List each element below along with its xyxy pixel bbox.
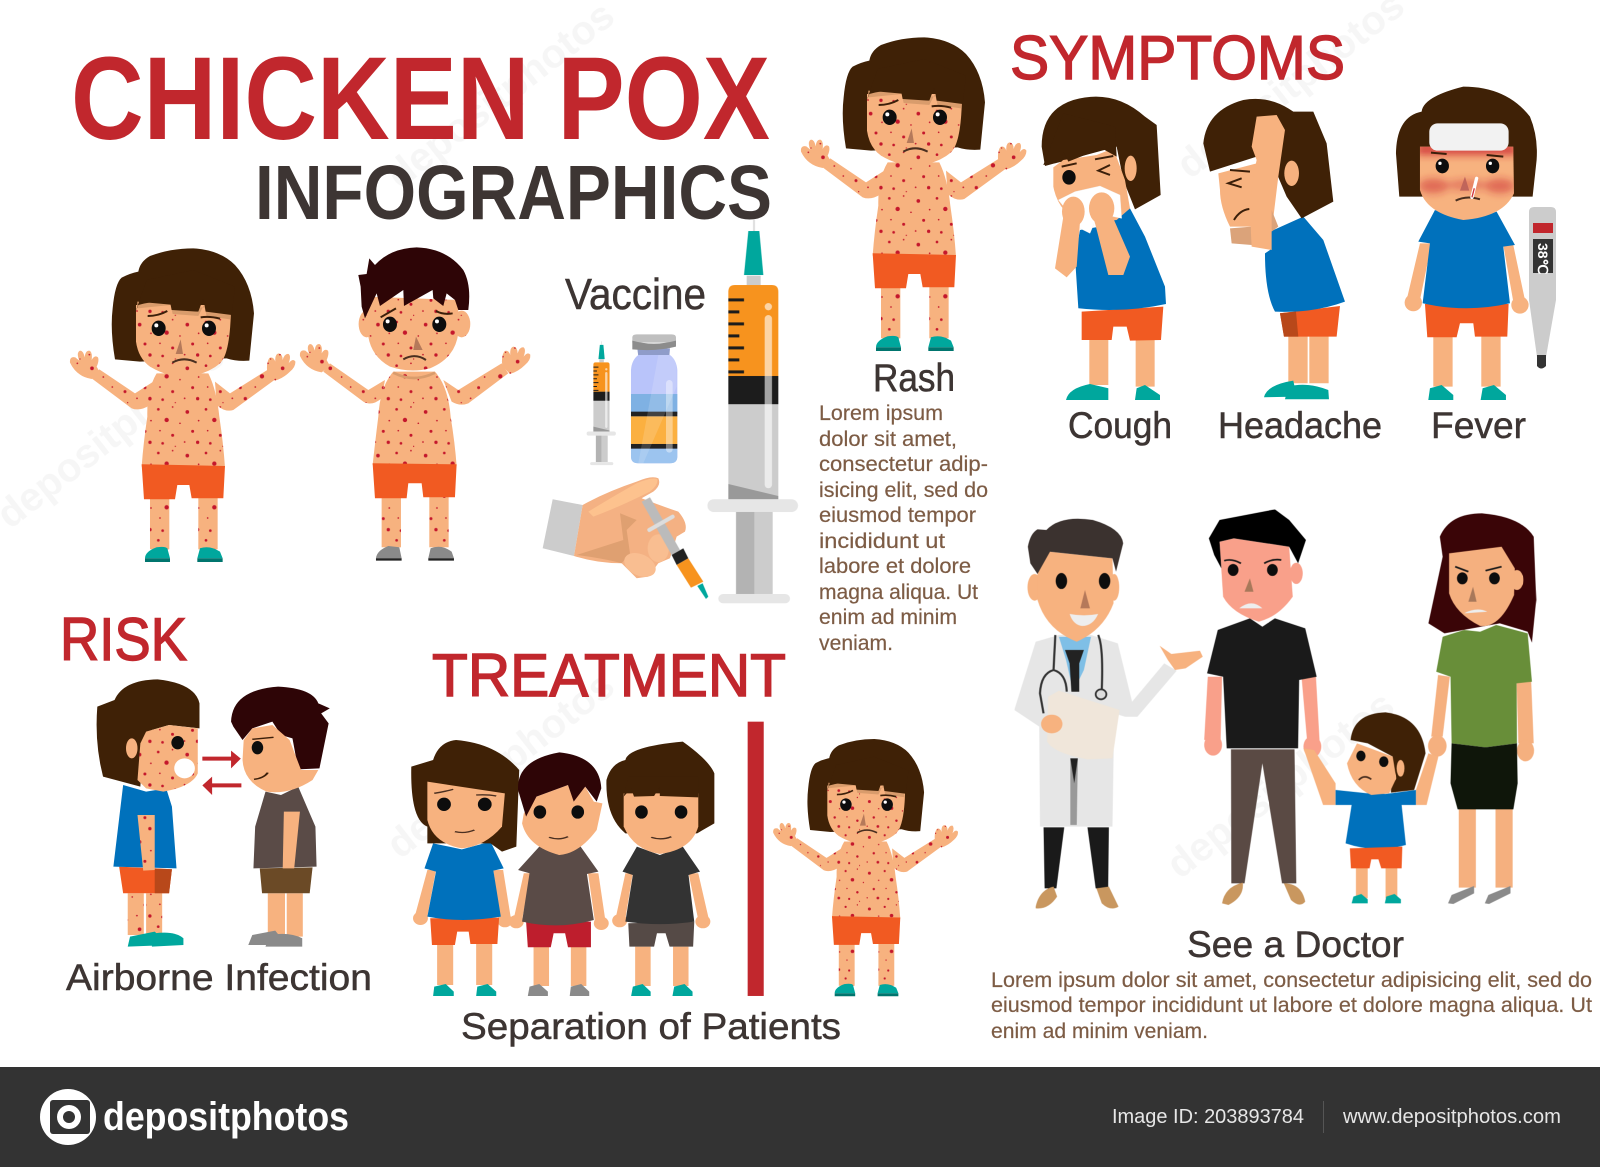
doctor description: Lorem ipsum dolor sit amet, consectetur adipisicing elit, sed do <box>991 969 1592 992</box>
symptom labels: Headache <box>1218 405 1382 446</box>
bob-hair girl <box>606 742 714 996</box>
healthy boy profile <box>231 687 330 947</box>
footer image id: Image ID: 203893784 <box>1112 1106 1304 1128</box>
watermark <box>0 0 1413 887</box>
headache girl <box>1203 99 1345 399</box>
father <box>1204 509 1321 905</box>
patient girl <box>773 739 958 996</box>
thermometer icon: 38℃ <box>1535 243 1551 275</box>
rash label: Rash <box>873 357 955 400</box>
rash description: eiusmod tempor <box>819 504 976 527</box>
title: CHICKEN POX <box>71 33 770 165</box>
airborne infection label: Airborne Infection <box>66 957 372 998</box>
risk and treatment figures <box>97 679 764 996</box>
separation bar <box>748 722 764 996</box>
doctor and family <box>1014 509 1536 909</box>
rash description: consectetur adip- <box>819 453 988 476</box>
separation label: Separation of Patients <box>461 1006 841 1047</box>
rash description: enim ad minim <box>819 606 957 629</box>
title: INFOGRAPHICS <box>255 150 772 236</box>
rash description: incididunt ut <box>819 530 945 553</box>
rash description: dolor sit amet, <box>819 428 957 451</box>
long-hair girl <box>411 740 519 996</box>
hand with syringe <box>543 477 708 599</box>
symptom labels <box>1068 405 1526 446</box>
symptoms figures <box>1042 87 1537 400</box>
doctor description: enim ad minim veniam. <box>991 1020 1208 1043</box>
infected child profile <box>97 679 199 947</box>
see a doctor label: See a Doctor <box>1187 924 1404 965</box>
watermark: depositphotos <box>378 663 623 867</box>
large syringe <box>707 220 798 603</box>
vial <box>631 334 677 463</box>
small syringe <box>587 341 616 465</box>
vaccine label: Vaccine <box>565 270 706 319</box>
rash description: magna aliqua. Ut <box>819 581 978 604</box>
rash description: isicing elit, sed do <box>819 479 988 502</box>
title <box>71 33 772 236</box>
footer logo: depositphotos <box>103 1095 349 1139</box>
footer url: www.depositphotos.com <box>1342 1106 1561 1128</box>
treatment heading: TREATMENT <box>432 642 786 709</box>
child <box>1303 712 1438 903</box>
footer logo <box>40 1089 349 1145</box>
symptom labels: Fever <box>1431 405 1526 446</box>
thermometer icon <box>1529 207 1556 368</box>
rash description: labore et dolore <box>819 555 971 578</box>
symptoms heading: SYMPTOMS <box>1010 24 1345 93</box>
rash description: Lorem ipsum <box>819 402 943 425</box>
doctor description: eiusmod tempor incididunt ut labore et dolore magna aliqua. Ut <box>991 994 1592 1017</box>
boy with rash <box>300 247 530 561</box>
mother <box>1428 513 1536 904</box>
airborne arrows <box>202 751 241 795</box>
rash description <box>819 402 988 655</box>
footer bar <box>0 1067 1600 1167</box>
rash girl <box>801 37 1026 351</box>
fever girl <box>1396 87 1537 400</box>
rash description: veniam. <box>819 632 893 655</box>
short-hair boy <box>509 752 609 996</box>
watermark: depositphotos <box>1158 683 1403 887</box>
vaccine illustration <box>543 220 798 603</box>
symptom labels: Cough <box>1068 405 1172 446</box>
cough girl <box>1042 97 1166 400</box>
risk heading: RISK <box>60 606 187 673</box>
doctor <box>1014 519 1203 909</box>
doctor description <box>991 969 1592 1043</box>
girl with rash <box>70 248 295 562</box>
